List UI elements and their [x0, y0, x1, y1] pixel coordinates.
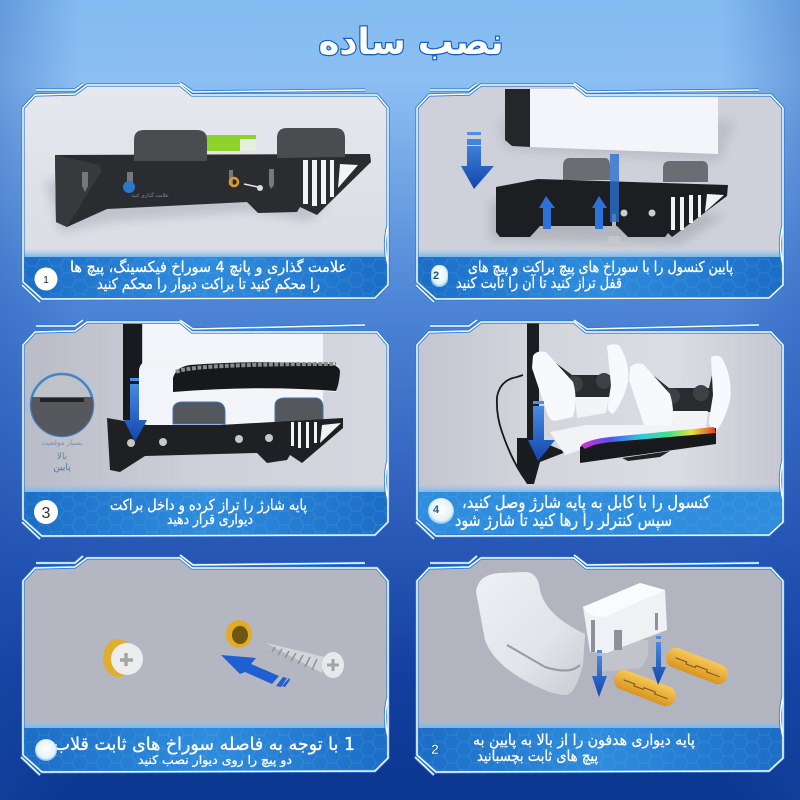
- console edge and cable: [497, 323, 566, 484]
- bracket with level: علامت گذاری کنید: [131, 192, 169, 199]
- wall anchors: [612, 645, 730, 709]
- caption: 1 با توجه به فاصله سوراخ های ثابت قلاب،: [48, 734, 355, 755]
- bracket with level: [45, 128, 371, 232]
- frame: [21, 555, 388, 775]
- caption: دیواری قرار دهید: [167, 512, 253, 528]
- panel: step 1 drill and mount bracket: [22, 83, 388, 302]
- badge 2: 2: [433, 270, 439, 282]
- caption: [23, 249, 388, 299]
- frame: [415, 555, 783, 775]
- controller front: [532, 344, 628, 421]
- panel: step 2 lower console onto bracket: [416, 83, 783, 302]
- panel: step 4 connect cable and charge controllers: [416, 320, 783, 539]
- arrow down: [124, 378, 147, 442]
- yellow wall anchor: [226, 620, 252, 648]
- caption: [23, 484, 388, 536]
- inset circle detail: [31, 374, 93, 473]
- arrows: [592, 636, 666, 697]
- caption: [417, 249, 783, 299]
- badge 1: 1: [43, 275, 49, 286]
- panel: step 5 wall screws: [21, 555, 388, 775]
- headphone wall hook: [476, 572, 667, 695]
- badge 4: [428, 498, 454, 524]
- caption: سپس کنترلر را رها کنید تا شارژ شود: [455, 511, 672, 531]
- caption: علامت گذاری و پانچ 4 سوراخ فیکسینگ، پیچ ها: [70, 258, 347, 277]
- frame: [22, 83, 388, 302]
- caption: [417, 720, 783, 772]
- inset circle detail: بالا: [57, 452, 67, 462]
- frame: [416, 83, 783, 302]
- controllers: [532, 344, 731, 431]
- panel: step 6 headphone hook: [415, 555, 783, 775]
- badge 2: 2: [431, 741, 439, 757]
- inset circle detail: بسیار موقعیت: [41, 439, 83, 447]
- arrow down: [528, 401, 555, 461]
- loose screw: [266, 643, 344, 678]
- badge 4: 4: [433, 504, 440, 516]
- caption: دو پیچ را روی دیوار نصب کنید: [138, 753, 292, 768]
- title: نصب ساده: [318, 22, 504, 63]
- caption: را محکم کنید تا براکت دیوار را محکم کنید: [97, 275, 320, 293]
- controller back: [629, 356, 731, 431]
- RGB charging dock: [550, 425, 716, 463]
- inset circle detail: پایین: [53, 463, 71, 473]
- caption: [417, 484, 783, 536]
- badge 3: 3: [42, 505, 51, 522]
- caption: پایین کنسول را با سوراخ های پیچ براکت و پیچ های: [468, 258, 733, 277]
- badge sphere: [35, 739, 57, 761]
- blue arrow: [221, 655, 290, 687]
- caption: پیچ های ثابت بچسبانید: [477, 747, 598, 766]
- badge 2: [431, 265, 448, 287]
- caption: قفل تراز کنید تا آن را ثابت کنید: [456, 274, 622, 292]
- caption: [23, 720, 388, 772]
- caption: کنسول را با کابل به پایه شارژ وصل کنید،: [462, 493, 711, 513]
- panel: step 3 charging base into bracket: [22, 320, 388, 539]
- installed screw: [103, 639, 143, 677]
- arrows: [461, 132, 619, 229]
- console and bracket: [107, 324, 343, 472]
- badge 3: [34, 500, 58, 524]
- frame: [416, 320, 783, 539]
- console and bracket: [490, 89, 735, 247]
- badge 1: [34, 268, 58, 290]
- caption: پایه دیواری هدفون را از بالا به پایین به: [473, 731, 695, 750]
- frame: [22, 320, 388, 539]
- caption: پایه شارژ را تراز کرده و داخل براکت: [110, 496, 307, 515]
